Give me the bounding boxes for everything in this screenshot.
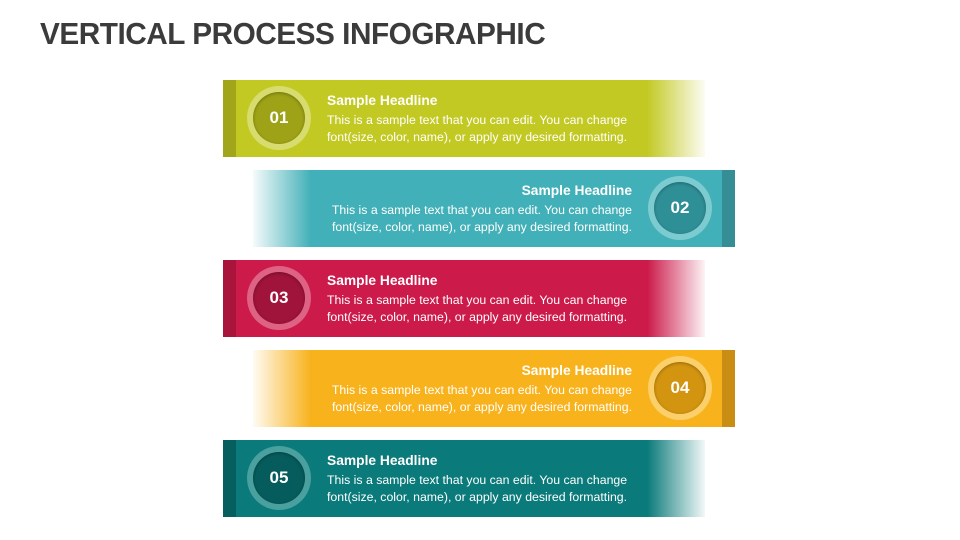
panel: step 03 xyxy=(223,260,705,337)
text: step 01: font(size, color, name), or apply any desired formatting. xyxy=(327,130,627,144)
text: step 03: Sample Headline xyxy=(327,273,437,288)
icon: number 03 xyxy=(247,266,311,330)
text: step 04: font(size, color, name), or apply any desired formatting. xyxy=(332,400,632,414)
icon: number 01: 01 xyxy=(270,108,288,127)
text: step 03: font(size, color, name), or apply any desired formatting. xyxy=(327,310,627,324)
text: step 03 xyxy=(327,273,627,324)
text: step 04 xyxy=(332,363,632,414)
icon: number 04 xyxy=(648,356,712,420)
icon: number 04: 04 xyxy=(671,378,689,397)
text: step 01: Sample Headline xyxy=(327,93,437,108)
text: step 05: font(size, color, name), or apply any desired formatting. xyxy=(327,490,627,504)
text: step 02: Sample Headline xyxy=(522,183,632,198)
panel: step 04 xyxy=(253,350,735,427)
icon: number 01 xyxy=(247,86,311,150)
text: step 05 xyxy=(327,453,627,504)
panel: step 01 xyxy=(223,80,705,157)
text: step 05: This is a sample text that you can edit. You can change xyxy=(327,473,627,487)
icon: number 05: 05 xyxy=(270,468,288,487)
icon: number 03: 03 xyxy=(270,288,288,307)
text: step 05: Sample Headline xyxy=(327,453,437,468)
text: step 01: This is a sample text that you can edit. You can change xyxy=(327,113,627,127)
panel: step 05 xyxy=(223,440,705,517)
icon: number 05 xyxy=(247,446,311,510)
panel: step 02 xyxy=(253,170,735,247)
title: VERTICAL PROCESS INFOGRAPHIC xyxy=(40,16,545,51)
text: step 02: font(size, color, name), or apply any desired formatting. xyxy=(332,220,632,234)
text: step 04: This is a sample text that you can edit. You can change xyxy=(332,383,632,397)
text: step 04: Sample Headline xyxy=(522,363,632,378)
icon: number 02 xyxy=(648,176,712,240)
text: step 02 xyxy=(332,183,632,234)
icon: number 02: 02 xyxy=(671,198,689,217)
text: step 02: This is a sample text that you can edit. You can change xyxy=(332,203,632,217)
text: step 03: This is a sample text that you can edit. You can change xyxy=(327,293,627,307)
text: step 01 xyxy=(327,93,627,144)
